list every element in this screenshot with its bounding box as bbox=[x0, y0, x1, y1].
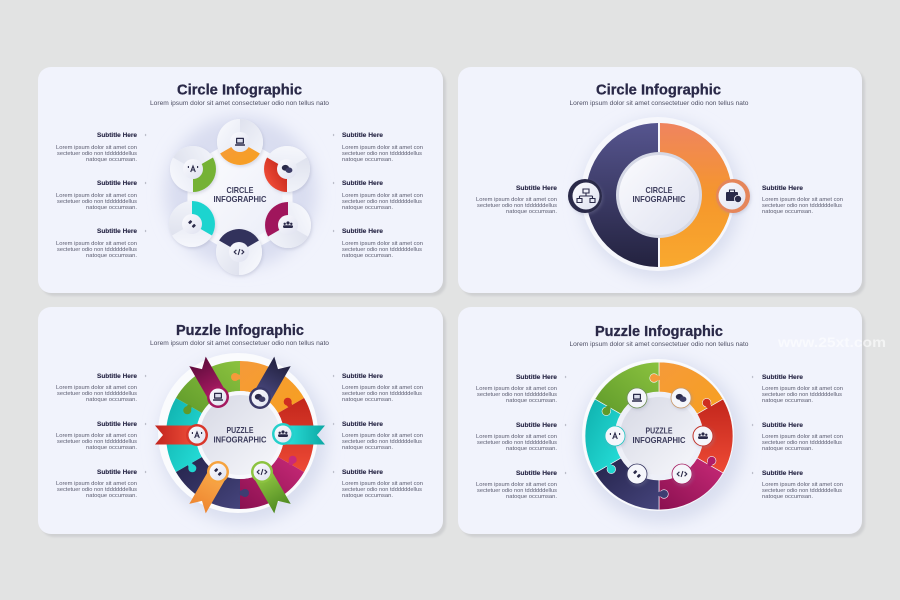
heading: Puzzle Infographic bbox=[176, 322, 304, 339]
text block left 2: sectetuer odio non tddddddellus bbox=[57, 199, 137, 205]
text block right 1: Lorem ipsum dolor sit amet con bbox=[762, 386, 843, 392]
soft glow behind chart bbox=[580, 359, 744, 523]
centre label bbox=[632, 426, 686, 445]
text block right 2 bbox=[342, 180, 423, 211]
text block left 3: Subtitle Here bbox=[97, 228, 137, 235]
icon: arrows bbox=[627, 464, 647, 484]
segment top orange bbox=[217, 119, 263, 165]
centre disc bbox=[616, 152, 702, 238]
text block right bbox=[762, 185, 843, 215]
icon: chat bbox=[671, 388, 691, 408]
text block right 1: natoque occumsan. bbox=[342, 157, 393, 163]
text block left 1 bbox=[56, 373, 137, 403]
centre label: INFOGRAPHIC bbox=[214, 195, 267, 204]
text block right 2: Lorem ipsum dolor sit amet con bbox=[762, 434, 843, 440]
text block right 3: Subtitle Here bbox=[342, 228, 383, 235]
text block right 1: sectetuer odio non tddddddellus bbox=[342, 391, 422, 397]
text block left 3 bbox=[476, 470, 557, 500]
text block left 2: Subtitle Here bbox=[516, 422, 557, 429]
left half navy bbox=[586, 123, 658, 267]
text block left 2: natoque occumsan. bbox=[506, 446, 557, 452]
watermark: www.25xt.com bbox=[777, 334, 886, 350]
text block left 3: natoque occumsan. bbox=[506, 494, 557, 500]
text block right: Subtitle Here bbox=[762, 185, 803, 192]
text block left 2: Lorem ipsum dolor sit amet con bbox=[56, 193, 137, 199]
text block left 3: sectetuer odio non tddddddellus bbox=[57, 247, 137, 253]
icon: people bbox=[272, 423, 294, 445]
soft glow behind chart bbox=[581, 119, 741, 279]
text block right 2: natoque occumsan. bbox=[762, 446, 813, 452]
ribbon left red bbox=[155, 426, 196, 444]
text block right 2: Subtitle Here bbox=[342, 421, 383, 428]
text block left 1 bbox=[476, 374, 557, 404]
centre disc bbox=[196, 391, 284, 479]
card shadow bbox=[41, 70, 446, 296]
text block right 3: natoque occumsan. bbox=[342, 253, 393, 259]
text block right 3: sectetuer odio non tddddddellus bbox=[342, 247, 422, 253]
text block left: sectetuer odio non tddddddellus bbox=[477, 203, 557, 209]
centre label: INFOGRAPHIC bbox=[214, 436, 267, 444]
text block left: natoque occumsan. bbox=[506, 209, 557, 215]
text block left 2: Lorem ipsum dolor sit amet con bbox=[56, 433, 137, 439]
text block left: Subtitle Here bbox=[516, 185, 557, 192]
text block right 3: sectetuer odio non tddddddellus bbox=[342, 487, 422, 493]
text block left 2 bbox=[56, 421, 137, 451]
text block right 2: Subtitle Here bbox=[342, 180, 383, 187]
text block right 1: Subtitle Here bbox=[762, 374, 803, 381]
text block right 1: natoque occumsan. bbox=[342, 397, 393, 403]
right half orange bbox=[660, 123, 732, 267]
ribbon bottom left orange bbox=[189, 468, 226, 513]
text block left 2: Subtitle Here bbox=[97, 421, 137, 428]
text block left 1 bbox=[56, 132, 137, 163]
text block right 3 bbox=[342, 228, 423, 259]
text block right 2 bbox=[342, 421, 423, 451]
hexagon hub bbox=[192, 142, 288, 252]
text block right: Lorem ipsum dolor sit amet con bbox=[762, 197, 843, 203]
text block right 2: sectetuer odio non tddddddellus bbox=[762, 440, 842, 446]
centre label bbox=[214, 186, 267, 204]
heading: Puzzle Infographic bbox=[595, 323, 723, 340]
centre disc bbox=[615, 392, 703, 480]
text block right 2: Lorem ipsum dolor sit amet con bbox=[342, 433, 423, 439]
card shadow bbox=[461, 310, 865, 537]
text block left 1: sectetuer odio non tddddddellus bbox=[477, 392, 557, 398]
ribbon top right navy bbox=[254, 357, 291, 402]
text block left 3: Lorem ipsum dolor sit amet con bbox=[56, 241, 137, 247]
text block left 3: natoque occumsan. bbox=[86, 493, 137, 499]
text block right 2: natoque occumsan. bbox=[342, 445, 393, 451]
text block right 3 bbox=[342, 469, 423, 499]
text block left 1: Subtitle Here bbox=[97, 132, 137, 139]
text block left 3: sectetuer odio non tddddddellus bbox=[57, 487, 137, 493]
segment upper right red bbox=[256, 138, 318, 200]
ring halo bbox=[158, 353, 318, 513]
text block left 3: Lorem ipsum dolor sit amet con bbox=[56, 481, 137, 487]
text block right 1: sectetuer odio non tddddddellus bbox=[342, 151, 422, 157]
text block right 2: sectetuer odio non tddddddellus bbox=[342, 199, 422, 205]
card bbox=[38, 67, 443, 293]
text block left 1: Subtitle Here bbox=[516, 374, 557, 381]
puzzle ring bbox=[166, 361, 314, 509]
card bbox=[458, 67, 862, 293]
icon: code bbox=[251, 461, 273, 483]
puzzle ring bbox=[585, 362, 733, 510]
text block right 2: natoque occumsan. bbox=[342, 205, 393, 211]
text block right 3: sectetuer odio non tddddddellus bbox=[762, 488, 842, 494]
centre label bbox=[632, 186, 686, 204]
text block right 2: Lorem ipsum dolor sit amet con bbox=[342, 193, 423, 199]
text block right 3: Lorem ipsum dolor sit amet con bbox=[342, 241, 423, 247]
centre label: CIRCLE bbox=[646, 186, 673, 195]
text block right 3: natoque occumsan. bbox=[342, 493, 393, 499]
centre label: INFOGRAPHIC bbox=[632, 195, 686, 204]
text block right 1: Lorem ipsum dolor sit amet con bbox=[342, 145, 423, 151]
text block right 2 bbox=[762, 422, 843, 452]
text block left 3: sectetuer odio non tddddddellus bbox=[477, 488, 557, 494]
text block right 3: Lorem ipsum dolor sit amet con bbox=[342, 481, 423, 487]
panel: circle infographic two halves bbox=[458, 67, 865, 296]
intro text: Lorem ipsum dolor sit amet consectetuer odio non tellus nato bbox=[570, 101, 749, 107]
text block right 1: Lorem ipsum dolor sit amet con bbox=[342, 385, 423, 391]
segment lower left teal bbox=[161, 193, 223, 255]
text block left 2: Lorem ipsum dolor sit amet con bbox=[476, 434, 557, 440]
text block left 2: sectetuer odio non tddddddellus bbox=[57, 439, 137, 445]
text block left 2 bbox=[56, 180, 137, 211]
text block left 3 bbox=[56, 228, 137, 259]
donut halo bbox=[581, 117, 735, 271]
card bbox=[38, 307, 443, 534]
centre label: INFOGRAPHIC bbox=[632, 436, 686, 445]
text block left 2: natoque occumsan. bbox=[86, 205, 137, 211]
intro text: Lorem ipsum dolor sit amet consectetuer odio non tellus nato bbox=[570, 342, 749, 348]
centre label bbox=[214, 426, 267, 444]
panel: puzzle infographic with icons bbox=[458, 307, 865, 537]
text block left 3: Subtitle Here bbox=[516, 470, 557, 477]
text block right 1 bbox=[762, 374, 843, 404]
heading: Circle Infographic bbox=[596, 82, 721, 98]
text block left 2: natoque occumsan. bbox=[86, 445, 137, 451]
text block left 2: Subtitle Here bbox=[97, 180, 137, 187]
text block right 3: Lorem ipsum dolor sit amet con bbox=[762, 482, 843, 488]
segment bottom navy bbox=[216, 229, 262, 275]
text block left 3: Subtitle Here bbox=[97, 469, 137, 476]
text block right 3 bbox=[762, 470, 843, 500]
icon: laptop bbox=[207, 386, 229, 408]
text block left 1: sectetuer odio non tddddddellus bbox=[57, 391, 137, 397]
segment upper left green bbox=[162, 138, 224, 200]
panel: puzzle infographic with ribbons bbox=[38, 307, 446, 537]
text block left 1: Lorem ipsum dolor sit amet con bbox=[56, 145, 137, 151]
ring halo bbox=[582, 359, 734, 511]
text block right 2: sectetuer odio non tddddddellus bbox=[342, 439, 422, 445]
centre label: CIRCLE bbox=[226, 186, 254, 195]
icon: laptop bbox=[627, 388, 647, 408]
centre label: PUZZLE bbox=[226, 426, 254, 435]
text block right 1: Subtitle Here bbox=[342, 132, 383, 139]
text block left 2 bbox=[476, 422, 557, 452]
card shadow bbox=[461, 70, 865, 296]
text block left 3 bbox=[56, 469, 137, 499]
text block left: Lorem ipsum dolor sit amet con bbox=[476, 197, 557, 203]
text block right 3: Subtitle Here bbox=[342, 469, 383, 476]
intro text: Lorem ipsum dolor sit amet consectetuer odio non tellus nato bbox=[150, 101, 330, 107]
ribbon right teal bbox=[284, 426, 325, 444]
icon: network bbox=[568, 179, 602, 213]
text block right 3: Subtitle Here bbox=[762, 470, 803, 477]
text block left 1: Subtitle Here bbox=[97, 373, 137, 380]
text block left 3: natoque occumsan. bbox=[86, 253, 137, 259]
text block right 1 bbox=[342, 132, 423, 163]
soft glow behind chart bbox=[159, 356, 327, 524]
text block right: natoque occumsan. bbox=[762, 209, 813, 215]
text block left 2: sectetuer odio non tddddddellus bbox=[477, 440, 557, 446]
soft glow behind chart bbox=[165, 116, 317, 268]
text block left 1: natoque occumsan. bbox=[86, 397, 137, 403]
text block right 1 bbox=[342, 373, 423, 403]
icon: letter bbox=[605, 426, 625, 446]
icon: arrows bbox=[207, 461, 229, 483]
text block right 1: sectetuer odio non tddddddellus bbox=[762, 392, 842, 398]
icon: briefcase bbox=[716, 179, 750, 213]
centre label: PUZZLE bbox=[646, 426, 673, 436]
text block left 1: Lorem ipsum dolor sit amet con bbox=[56, 385, 137, 391]
icon: people bbox=[693, 426, 713, 446]
ribbon bottom right green bbox=[254, 468, 291, 513]
text block right 1: Subtitle Here bbox=[342, 373, 383, 380]
text block left 1: natoque occumsan. bbox=[86, 157, 137, 163]
card shadow bbox=[41, 310, 446, 537]
text block left bbox=[476, 185, 557, 215]
text block left 1: Lorem ipsum dolor sit amet con bbox=[476, 386, 557, 392]
heading: Circle Infographic bbox=[177, 82, 302, 98]
text block right 3: natoque occumsan. bbox=[762, 494, 813, 500]
text block right 2: Subtitle Here bbox=[762, 422, 803, 429]
icon: chat bbox=[249, 387, 271, 409]
panel: circle infographic six segments bbox=[38, 67, 446, 296]
text block left 1: sectetuer odio non tddddddellus bbox=[57, 151, 137, 157]
text block left 1: natoque occumsan. bbox=[506, 398, 557, 404]
ribbon top left maroon bbox=[189, 357, 226, 402]
icon: letter bbox=[186, 424, 208, 446]
segment lower right magenta bbox=[257, 194, 319, 256]
text block right 1: natoque occumsan. bbox=[762, 398, 813, 404]
card bbox=[458, 307, 862, 534]
icon: code bbox=[672, 464, 692, 484]
text block left 3: Lorem ipsum dolor sit amet con bbox=[476, 482, 557, 488]
intro text: Lorem ipsum dolor sit amet consectetuer odio non tellus nato bbox=[150, 341, 330, 347]
text block right: sectetuer odio non tddddddellus bbox=[762, 203, 842, 209]
